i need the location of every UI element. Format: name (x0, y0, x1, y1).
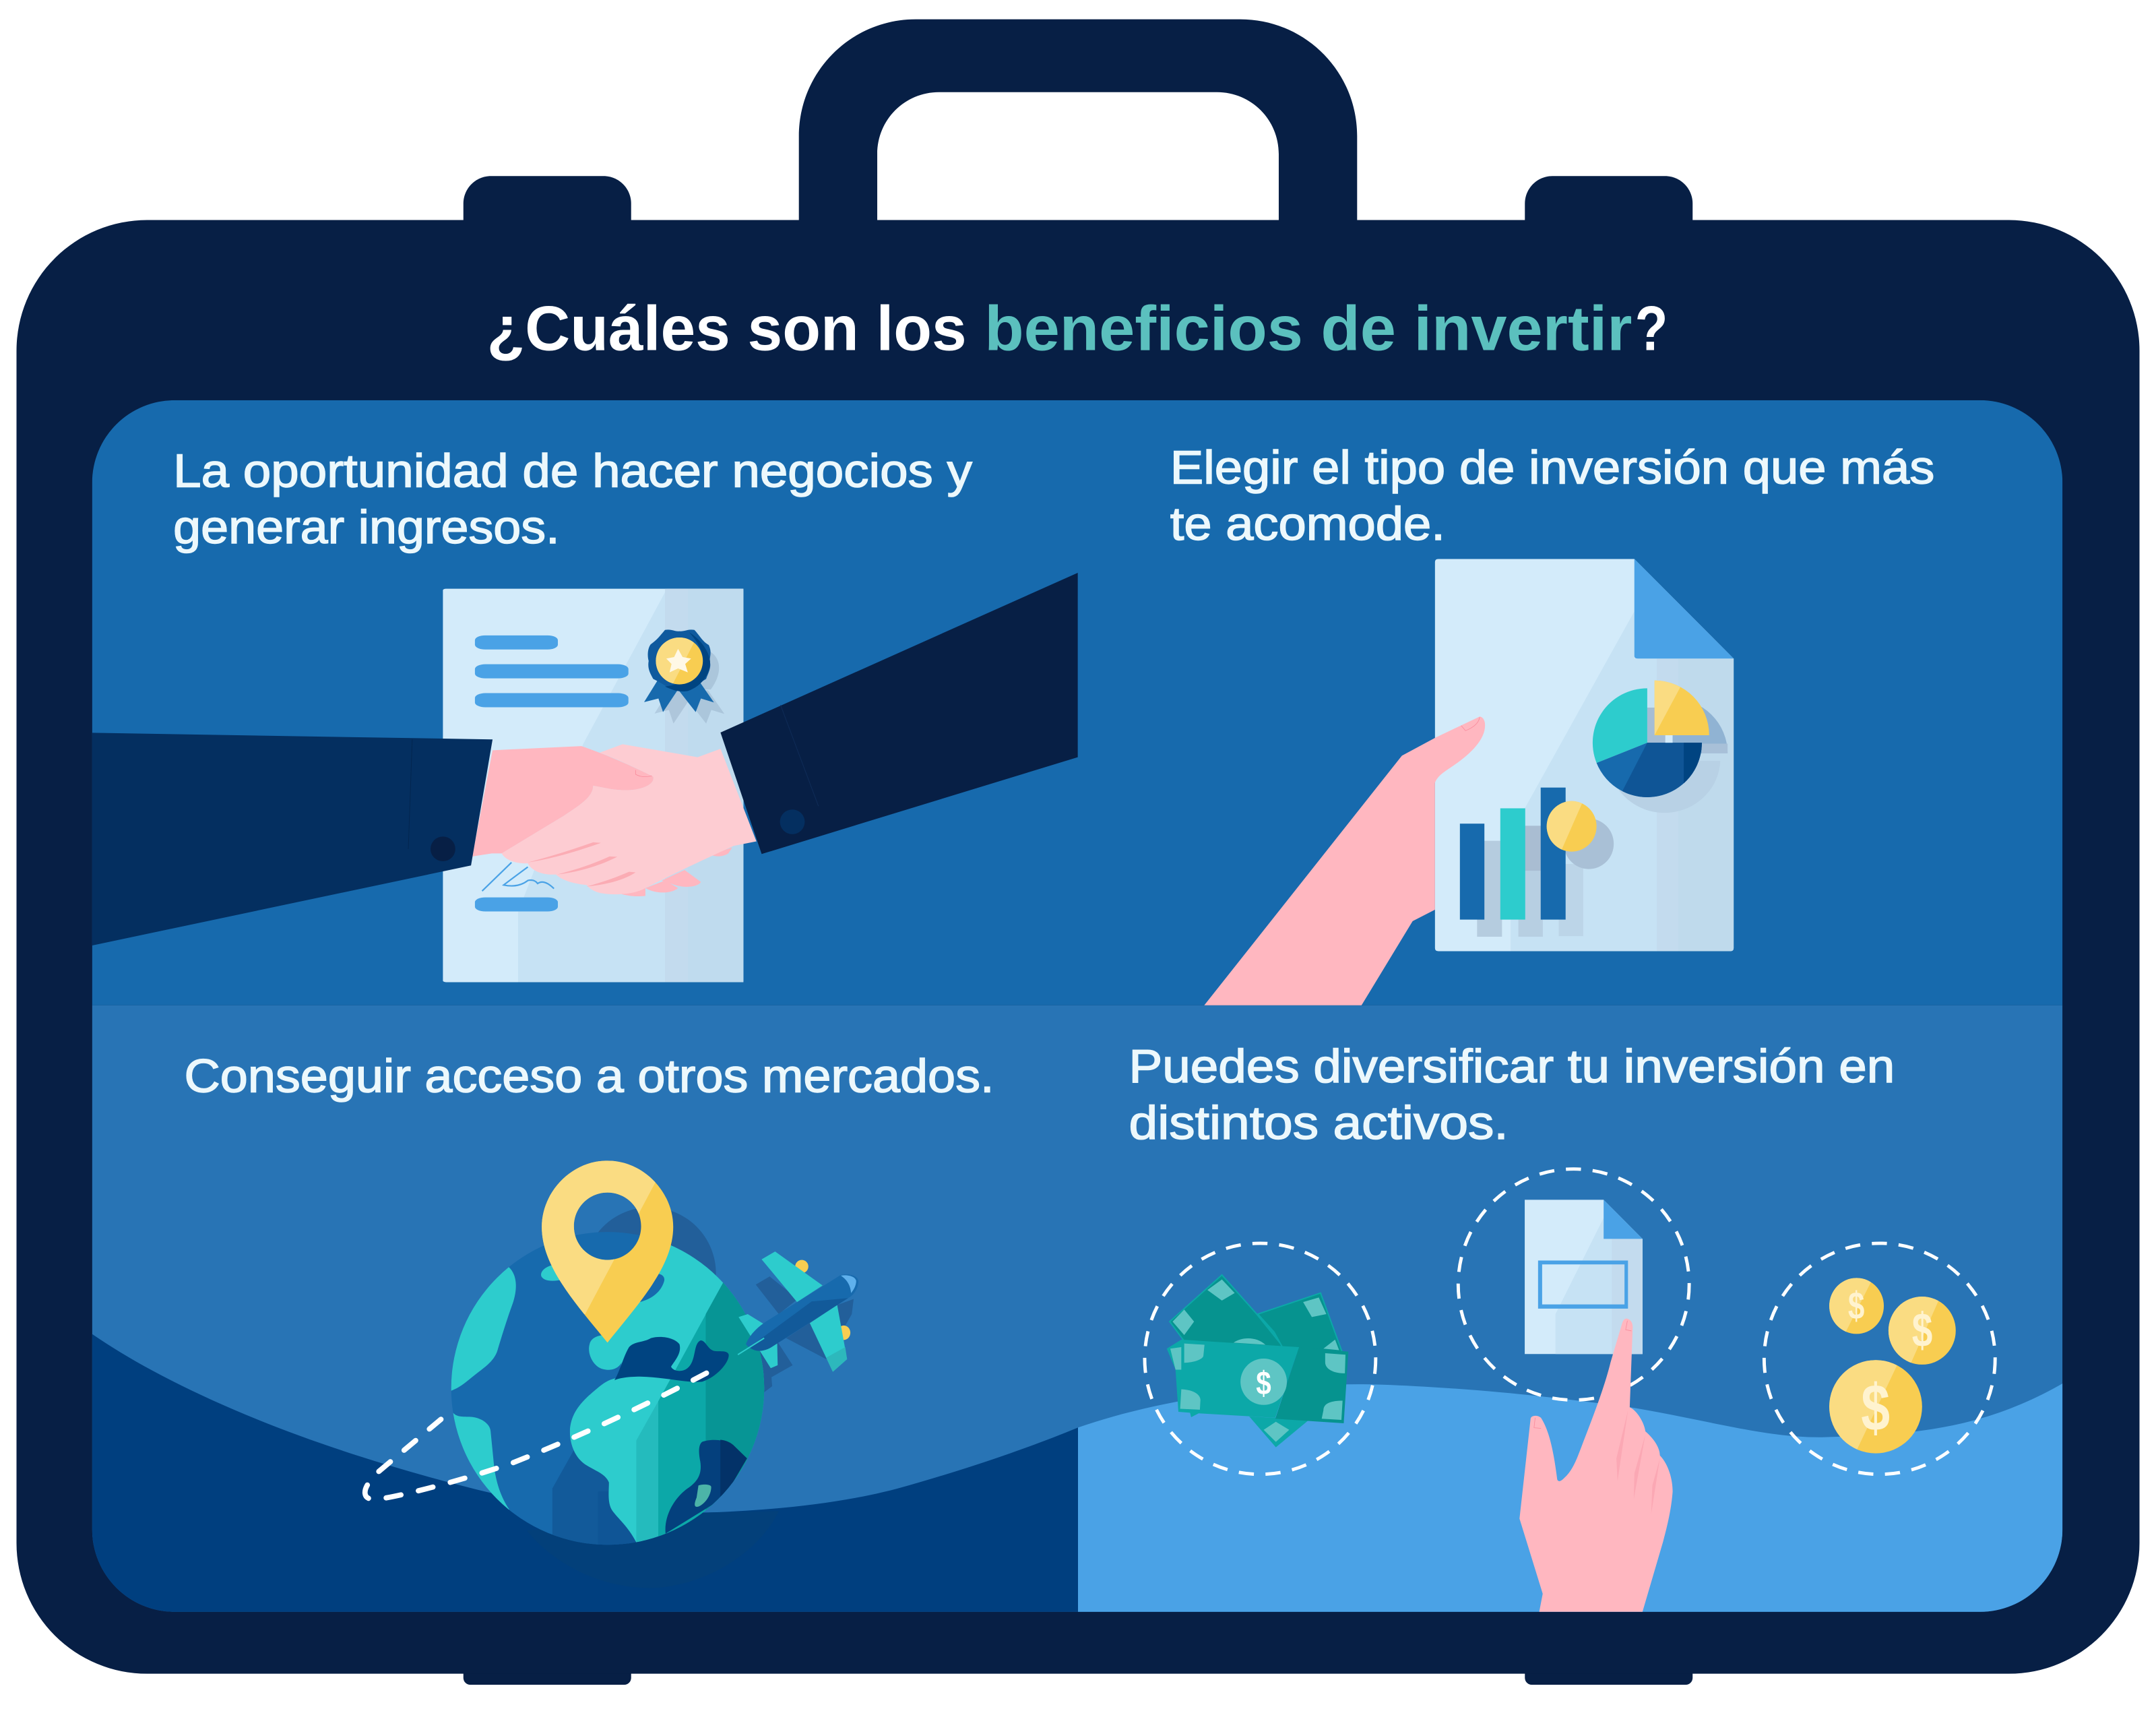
flight path dashed line (365, 1367, 718, 1499)
illustration: report document held by hand (1204, 559, 1734, 1005)
title (486, 292, 1668, 363)
panel 2 text (1170, 441, 1934, 550)
icon: medal (644, 629, 724, 724)
pin shadow (583, 1207, 716, 1340)
panel 1 text (173, 444, 972, 553)
icon: coins (1825, 1275, 1956, 1456)
panel backgrounds (92, 400, 2062, 1612)
report document (1435, 559, 1734, 951)
panel 2 text: Elegir el tipo de inversión que más (1170, 441, 1934, 493)
dollar sign on banknote: $ (1256, 1365, 1271, 1402)
icon: location pin (542, 1160, 674, 1342)
illustration: handshake over certificate (92, 573, 1078, 982)
title: ? (1635, 292, 1668, 363)
title: ¿Cuáles son los (486, 292, 967, 363)
panel 4 text: Puedes diversificar tu inversión en (1129, 1040, 1895, 1092)
pie chart (1593, 681, 1727, 813)
left sleeve (92, 733, 493, 945)
globe ground shadow (527, 1511, 779, 1588)
title: beneficios de invertir (984, 292, 1632, 363)
dollar sign medium coin: $ (1912, 1303, 1932, 1357)
dashed ring: document (1458, 1169, 1689, 1400)
right sleeve (720, 573, 1078, 854)
plane shadow (738, 1276, 854, 1392)
hand holding document (1204, 716, 1485, 1005)
globe (451, 1232, 764, 1545)
continents (451, 1267, 516, 1391)
dollar sign small coin: $ (1848, 1284, 1864, 1328)
hand pointing (1519, 1319, 1673, 1612)
illustration: globe with pin and airplane (451, 1160, 858, 1545)
panel 3 text: Conseguir acceso a otros mercados. (184, 1049, 994, 1102)
panel 2 text: te acomode. (1170, 497, 1445, 550)
illustration: diversified assets (1145, 1169, 1995, 1612)
panel 1 text: generar ingresos. (173, 501, 560, 553)
panel 1 text: La oportunidad de hacer negocios y (173, 444, 972, 497)
icon: banknotes (1167, 1275, 1348, 1448)
icon: airplane (738, 1251, 858, 1372)
bar chart (1460, 788, 1614, 937)
dollar sign large coin: $ (1861, 1370, 1890, 1444)
dashed ring: coins (1764, 1243, 1995, 1474)
panel 4 text: distintos activos. (1129, 1096, 1509, 1149)
certificate document (443, 589, 743, 982)
dashed ring: money (1145, 1243, 1376, 1474)
panel 4 text (1129, 1040, 1895, 1149)
hands shaking (472, 744, 757, 896)
icon: document (1525, 1200, 1643, 1354)
